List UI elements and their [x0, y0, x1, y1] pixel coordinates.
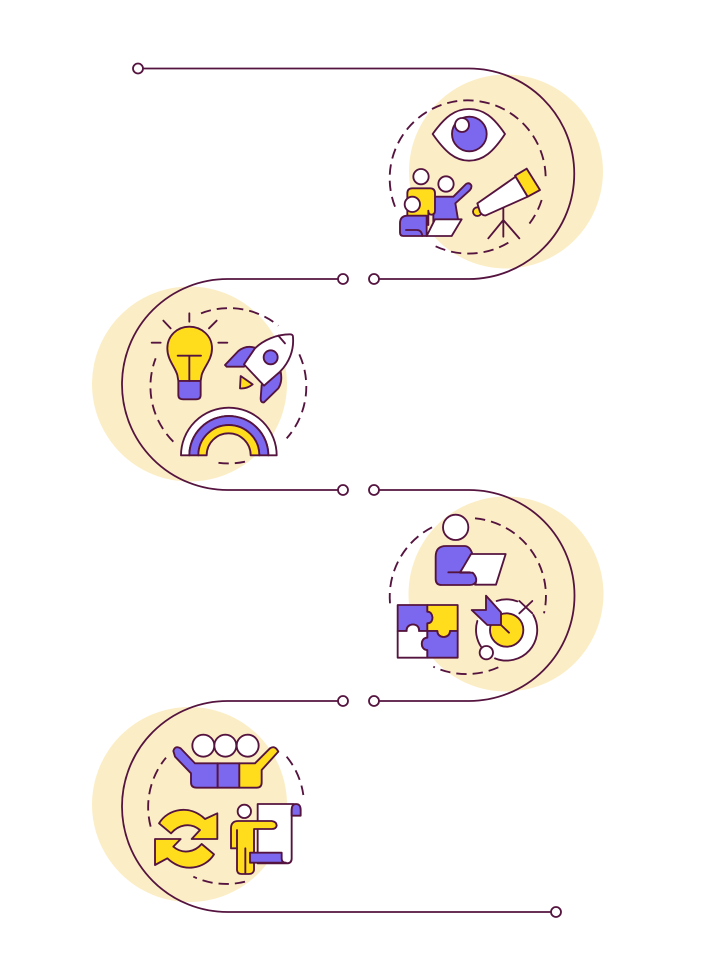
icon: cycle arrows [155, 810, 217, 868]
icons group 2 [150, 308, 306, 463]
node 3a [369, 485, 379, 495]
node 4a [338, 696, 348, 706]
background circle 4 [92, 707, 287, 902]
icon: telescope [473, 169, 540, 238]
panel: step 3 planning [369, 485, 604, 706]
connector line 3 [374, 490, 575, 701]
icon: rocket [225, 334, 293, 402]
dashed ring 2 [150, 308, 306, 463]
background circle 1 [409, 74, 603, 268]
end node 1 [369, 274, 379, 284]
background circle 2 [92, 286, 287, 482]
connector line 2 [122, 279, 343, 490]
end node 4 [551, 907, 561, 917]
panel: step 4 teamwork [92, 696, 561, 917]
dashed ring 1 [390, 100, 546, 254]
connector line 1 [138, 68, 574, 279]
connector line 4 [122, 701, 556, 912]
icon: team with raised arms [173, 735, 278, 788]
icon: eye [433, 109, 505, 161]
icon: light bulb [152, 313, 227, 399]
dashed ring 4 [148, 757, 303, 884]
icon: group of people with laptop [400, 169, 471, 236]
icons group 1 [390, 100, 546, 254]
icons group 3 [390, 515, 546, 674]
node 2b [338, 485, 348, 495]
background circle 3 [408, 496, 604, 692]
icon: puzzle [398, 605, 458, 658]
panel: step 1 vision [133, 64, 603, 284]
dashed ring 3 [390, 518, 546, 674]
node 3b [369, 696, 379, 706]
node 2a [338, 274, 348, 284]
panel: step 2 ideas [92, 274, 348, 495]
icon: presenter with scroll [231, 804, 301, 874]
icons group 4 [148, 735, 303, 884]
icon: rainbow [181, 408, 277, 455]
start node 1 [133, 64, 143, 74]
icon: target with arrow [472, 596, 537, 661]
icon: person at laptop [436, 515, 506, 585]
